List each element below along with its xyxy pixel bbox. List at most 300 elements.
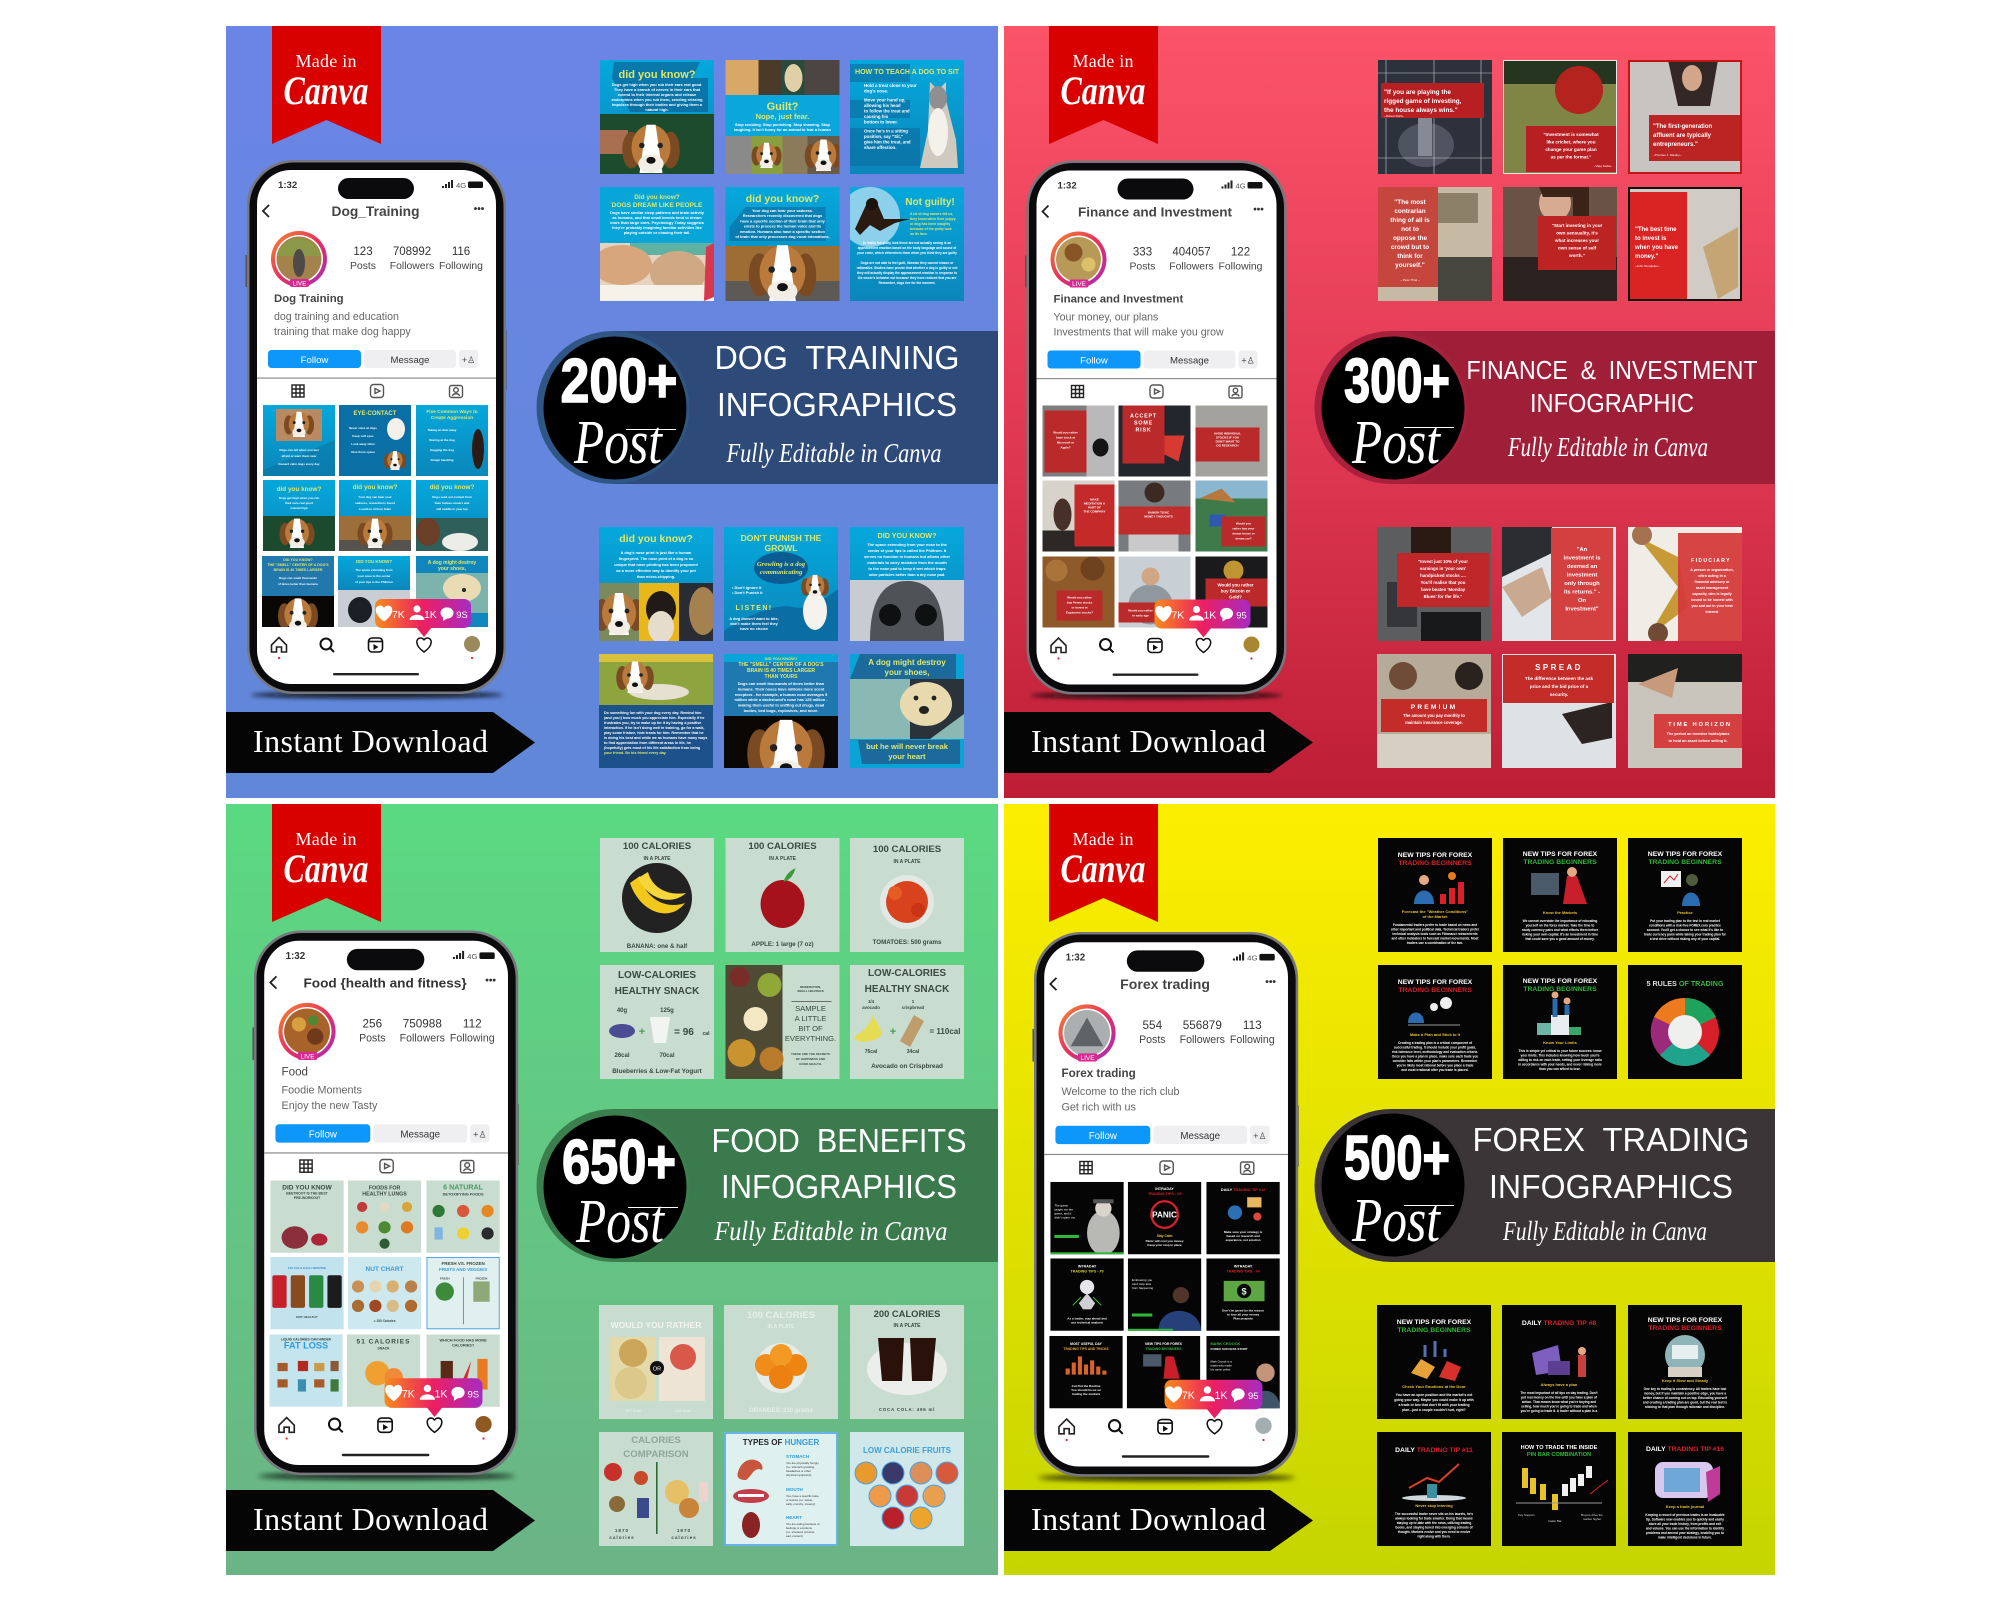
tile: forecast weather: TRADING BEGINNERS: [1398, 860, 1472, 867]
tile: contrarian quote: thing of all is: [1390, 217, 1430, 224]
profile header: Dog_Training: [332, 204, 420, 219]
tile: avocado on crispbread: 34cal: [907, 1049, 920, 1055]
tile: make a plan: [1378, 965, 1492, 1079]
tile: nose print: did you know?: [619, 533, 693, 545]
thumb: foods for healthy lungs: [348, 1180, 421, 1253]
stats: 123: [353, 246, 373, 258]
tile: rigged game quote: ~Robert Rolih~: [1384, 114, 1404, 118]
instant download arrow: Instant Download: [253, 723, 488, 759]
tile: don't punish the growl: have no choice: [740, 626, 769, 631]
tile: best time to invest: money.": [1635, 254, 1659, 260]
thumb: banish toxic money thoughts: MONEY THOUGHTS: [1144, 514, 1173, 518]
tile: teach a dog to sit: bottom to lower.: [864, 120, 898, 124]
tile: sample a little: GOOD HEALTH.: [799, 1062, 822, 1066]
thumb: avoid individual stocks: [1196, 406, 1268, 476]
thumb: day trading tips: trading the markets: [1072, 1392, 1100, 1396]
tile: daily tip 16: Keep a trade journal: [1666, 1504, 1704, 1509]
tile: cricket quote: "Investment is somewhat: [1543, 132, 1599, 137]
tile: apple: 100 CALORIES: [748, 841, 817, 852]
tile: contrarian quote: "The most: [1394, 199, 1427, 206]
likes bubble: [385, 1378, 482, 1417]
thumb: which food has more calories: [426, 1334, 500, 1407]
avatar: LIVE: [300, 1054, 315, 1061]
thumb: which food has more calories: CALORIES?: [452, 1343, 475, 1348]
tile: calories comparison: CALORIES: [631, 1435, 681, 1446]
thumb: dog photo: Dogs can tell when you feel: [279, 448, 319, 452]
tile: on investment: [1502, 527, 1616, 641]
bio: dog training and education: [274, 311, 399, 323]
tile: teach a dog to sit: HOW TO TEACH A DOG TO SIT: [855, 67, 960, 76]
thumb: five common ways: Hugging the dog: [430, 448, 454, 452]
status bar: 1:32: [1058, 180, 1077, 192]
thumb: new tips: TRADING BEGINNERS: [1145, 1347, 1182, 1351]
tile: avocado on crispbread: Avocado on Crispbread: [871, 1063, 943, 1070]
tile: guilt: Nope, just fear.: [756, 112, 809, 121]
thumb: accept some risk: ACCEPT: [1130, 414, 1157, 420]
thumb: apple: Apple?: [1060, 446, 1071, 450]
tile: types of hunger: STOMACH: [786, 1454, 810, 1459]
phone mockup: [1032, 932, 1299, 1481]
tile: fiduciary: financial advisory or: [1695, 580, 1730, 584]
buttons: [268, 350, 478, 368]
tile: teach a dog to sit: causing his: [864, 114, 889, 119]
status bar: 4G: [467, 952, 478, 961]
tile: best time to invest: to invest is: [1635, 236, 1667, 242]
tile: did you know ears: impulses through their bodies and giving them a: [612, 102, 703, 107]
thumb: robot: use technical analysis: [1071, 1321, 1103, 1325]
profile header: [1042, 204, 1264, 220]
thumb: 51 calories snack: SNACK: [377, 1347, 390, 1351]
tile: daily tip 11: thought. Markets evolve and you need to evolve: [1398, 1530, 1471, 1534]
tile: avocado on crispbread: 76cal: [865, 1049, 878, 1055]
tile: practice: trade currency pairs while taking your trading plan for: [1644, 932, 1727, 936]
buttons: +♙: [1241, 356, 1255, 366]
bio: [282, 1065, 378, 1112]
tile: not guilty: they know when their puppy: [910, 217, 956, 221]
thumb: daily tip 12: Make sure your strategy is: [1224, 1230, 1263, 1234]
tile: fiduciary: capacity, who is legally: [1692, 592, 1732, 596]
tile: would you rather: WOULD YOU RATHER: [611, 1320, 702, 1330]
tile: teach a dog to sit: allowing his head: [864, 103, 901, 108]
tile: banana: IN A PLATE: [643, 856, 671, 862]
tile: invest 10 percent: [1377, 527, 1491, 641]
tile: invest 10 percent: Blues' for the life.": [1424, 594, 1462, 599]
tile: beagle in field: is doing his best and while we as humans have many ways: [604, 736, 707, 740]
tile: first generation quote: [1628, 60, 1742, 174]
tile: blueberries and yogurt: 125g: [660, 1008, 674, 1014]
tile: types of hunger: MOUTH: [786, 1487, 804, 1492]
tile: daily tip 8: Always have a plan: [1541, 1382, 1578, 1387]
thumb: man in suit: Embracing you: [1132, 1278, 1153, 1282]
tile: first generation quote: affluent are typically: [1653, 133, 1712, 139]
tile: don't punish the growl: GROWL: [765, 543, 797, 553]
tile: did you know ears: extend to their internal organs and release: [618, 92, 697, 97]
stats: 113: [1243, 1019, 1262, 1032]
thumb: daily tip 12: based on research and: [1226, 1234, 1260, 1238]
tile: daily tip 16: tip. Software now enables you to quickly and easily: [1646, 1518, 1724, 1522]
thumb: dream house: Would you: [1236, 522, 1251, 526]
thumb: banish toxic money thoughts: BANISH TOXIC: [1148, 510, 1170, 514]
buttons: Follow: [309, 1130, 338, 1141]
tile: best time to invest: [1628, 187, 1742, 301]
tile: know your limits: TRADING BEGINNERS: [1523, 986, 1597, 993]
thumb: panic: Keep your stop in place: [1147, 1243, 1182, 1247]
banner title: INFOGRAPHICS: [721, 1168, 957, 1205]
tile: did you know sadness: Your dog can hear your sadness.: [752, 208, 813, 213]
likes bubble: [1165, 1380, 1262, 1419]
tile: know the markets: that could save you a good amount of money.: [1525, 937, 1595, 941]
ribbon: Made in Canva: [272, 804, 381, 922]
tile: beagle in field: interaction. If he isn't doing well in training, go for a walk,: [604, 726, 704, 730]
tile: keep it slow: sticking to that plan through rationale and discipline.: [1645, 1405, 1725, 1409]
thumb: accept some risk: [1118, 406, 1190, 476]
thumb: day trading tips: You should focus on: [1071, 1388, 1101, 1392]
post count badge: [544, 1116, 686, 1258]
profile header: Forex trading: [1120, 977, 1210, 992]
tile: low calorie fruits: LOW CALORIE FRUITS: [863, 1446, 952, 1455]
thumb: five common ways: Rough handling: [431, 458, 454, 462]
tile: sensuality quote: [1503, 185, 1617, 301]
ribbon: Made in Canva: [1049, 804, 1158, 922]
tile: on investment: its returns." -: [1564, 590, 1600, 596]
tile: coca cola: [850, 1305, 964, 1419]
ribbon: Made in Canva: Canva: [284, 68, 368, 113]
tile: blueberries and yogurt: 40g: [617, 1008, 628, 1014]
tile: coca cola: COCA COLA: 496 ml: [879, 1407, 935, 1412]
tile: cricket quote: change your game plan: [1545, 147, 1597, 152]
thumb: apple: Microsoft or: [1057, 440, 1075, 444]
tile: types of hunger: physical symptoms): [786, 1473, 811, 1477]
tile: guilt: Stop scolding. Stop punishing. Stop shaming. Stop: [735, 122, 831, 127]
thumb: meditation: MAKE: [1090, 498, 1099, 502]
thumb: panic: Panic will cost you money: [1146, 1239, 1184, 1243]
tile: spread: price and the bid price of a: [1530, 684, 1589, 689]
buttons: Message: [1170, 356, 1209, 366]
tile: check your emotions: NEW TIPS FOR FOREX: [1397, 1319, 1472, 1326]
thumb: fresh vs frozen: FRESH VS. FROZEN: [441, 1261, 485, 1266]
tile: blueberries and yogurt: cal: [703, 1031, 710, 1037]
tile: forecast weather: NEW TIPS FOR FOREX: [1398, 852, 1473, 859]
tile: forecast weather: and other indicators to forecast market movements. Most: [1392, 936, 1479, 940]
tile: blueberries and yogurt: Blueberries & Low-Fat Yogurt: [612, 1068, 703, 1075]
thumb: robot: TRADING TIPS - #9: [1070, 1270, 1104, 1274]
thumb: dollars: Plan properly: [1233, 1317, 1253, 1321]
tile: make a plan: and most irrational after you trade is placed.: [1401, 1068, 1469, 1072]
profile header: [1050, 977, 1276, 992]
tile: contrarian quote: crowd but to: [1391, 244, 1429, 251]
tile: know the markets: NEW TIPS FOR FOREX: [1523, 851, 1598, 858]
likes bubble: [1154, 600, 1250, 638]
tile: types of hunger: You crave a specific taste: [786, 1494, 819, 1498]
thumb: nose: DID YOU KNOW?: [356, 559, 392, 564]
thumb: man in hat quote: game, and it: [1054, 1212, 1071, 1216]
tile: banana: [600, 838, 714, 952]
thumb: man in hat quote: The game: [1054, 1203, 1068, 1207]
thumb: did you know dog: their ears real good: [285, 501, 313, 505]
tile: sample a little: THESE ARE THE SECRETS: [791, 1052, 830, 1056]
instant download arrow: [226, 712, 535, 773]
ribbon: Made in Canva: Made in: [296, 829, 356, 849]
thumb: avoid individual stocks: DON'T WANT TO: [1216, 440, 1240, 444]
ribbon: Made in Canva: Made in: [296, 51, 356, 71]
thumb: fresh vs frozen: FRUITS AND VEGGIES: [439, 1267, 487, 1272]
tile: on investment: investment: [1567, 572, 1597, 578]
tile: destroy your shoes: your shoes,: [885, 668, 929, 677]
status bar: 1:32: [278, 180, 297, 191]
thumb: foods for healthy lungs: FOODS FOR: [369, 1186, 400, 1192]
tile: make a plan: Creating a trading plan is a critical component of: [1398, 1041, 1473, 1045]
tile: best time to invest: "The best time: [1635, 227, 1677, 233]
thumb: daily tip 12: experience, not emotion: [1226, 1238, 1261, 1242]
status bar: 4G: [456, 181, 466, 190]
tile: types of hunger: or texture (i.e. sweet,: [786, 1498, 813, 1502]
profile header: •••: [474, 204, 485, 215]
tile: fiduciary: asset management: [1696, 586, 1729, 590]
bio: Forex trading: [1062, 1067, 1136, 1080]
tile: types of hunger: You are physically hungry: [786, 1461, 819, 1465]
thumb: sodas: NOT HEALTHY: [296, 1315, 318, 1319]
tile: types of hunger: (i.e. stomach growling,: [786, 1465, 815, 1469]
tile: destroy your shoes: [850, 654, 964, 768]
thumb: nose: your nose to the center: [357, 574, 391, 578]
tile: oranges: 100 CALORIES: [747, 1310, 816, 1321]
thumb: five common ways: [416, 405, 488, 476]
tile: time horizon: The period an investor holds/plans: [1667, 732, 1729, 736]
tile: dogs dream: playing outside or chasing their tail.: [624, 230, 690, 235]
tile: daily tip 16: DAILY TRADING TIP #16: [1646, 1446, 1724, 1453]
tile: don't punish the growl: DON'T PUNISH THE: [741, 533, 822, 543]
tile: avocado on crispbread: +: [890, 1026, 896, 1038]
tile: philtrum: center of your lips is called the Philtrum. It: [868, 548, 947, 553]
tile: check your emotions: Check Your Emotions at the Door: [1402, 1384, 1466, 1389]
banner title: FOREX TRADING: [1472, 1121, 1750, 1158]
buttons: Follow: [301, 355, 328, 366]
thumb: nose: of your lips is the Philtrum: [355, 580, 393, 584]
tile: teach a dog to sit: give him the treat, and: [864, 140, 911, 144]
status bar: 1:32: [286, 951, 306, 962]
thumb: 51 calories snack: 51 CALORIES: [357, 1339, 411, 1346]
post count badge: 500+: [1344, 1124, 1450, 1193]
thumb: did you know beagle: sadness, researchers found: [355, 501, 395, 505]
tile: did you know ears: natural high.: [645, 107, 669, 112]
tile: beagle in field: play some frisbee, hide treats for him. Remember that he: [604, 731, 704, 735]
stats: Posts: [359, 1033, 386, 1045]
tile: philtrum: to the nose pad to keep it wet which traps: [868, 566, 946, 571]
tile: would you rather: OR: [653, 1366, 661, 1372]
tile: invest 10 percent: handpicked stocks ....: [1420, 573, 1466, 578]
stats: 122: [1231, 246, 1250, 258]
tile: daily tip 11: The successful trader never sits on his laurels, he's: [1395, 1512, 1473, 1516]
thumb: smell centre: THE "SMELL" CENTER OF A DOG'S: [267, 563, 329, 567]
stats: [350, 246, 483, 272]
tile: invest 10 percent: "Invest just 10% of your: [1418, 559, 1468, 564]
tile: did you know sadness: have a specific section of their brain that only: [740, 218, 826, 223]
instant download arrow: [1004, 712, 1313, 773]
tile: dogs dream: as humans, and that small breeds tend to dream: [612, 215, 702, 220]
tab icons: [1072, 385, 1242, 398]
thumb: mark croock: trader who made: [1210, 1364, 1232, 1368]
tile: don't punish the growl: communicating: [760, 569, 803, 576]
tile: apple: APPLE: 1 large (7 oz): [751, 941, 814, 948]
thumb: bitcoin or gold: Gold?: [1229, 594, 1242, 600]
thumb: smell centre: Dogs can smell thousands: [279, 576, 317, 580]
thumb: dollars: INTRADAY: [1234, 1265, 1253, 1269]
thumb: mark croock: Mark Croock is a: [1210, 1359, 1232, 1363]
stats: Followers: [1169, 262, 1214, 272]
tile: tomatoes: [850, 838, 964, 952]
thumb: man in suit: from happening: [1132, 1286, 1153, 1290]
tile: nose print: than micro-chipping.: [637, 574, 675, 579]
thumb: smell centre: [262, 556, 334, 632]
likes bubble: 1K: [1204, 610, 1216, 622]
banner title: INFOGRAPHICS: [717, 386, 957, 423]
thumb: bitcoin or gold: buy Bitcoin or: [1221, 588, 1251, 594]
tile: smell centre: THAN YOURS: [765, 674, 798, 680]
tile: best time to invest: when you have: [1634, 245, 1679, 251]
tile: philtrum: serves no function in humans but allows other: [864, 554, 950, 559]
tile: keep it slow: TRADING BEGINNERS: [1648, 1325, 1722, 1332]
tile: pin bar combination: Key Support: [1518, 1513, 1535, 1517]
tile: beagle in field: to find appreciation from different areas in life, he: [604, 741, 691, 745]
status bar: 4G: [1247, 954, 1258, 963]
tile: nose print: fingerprint. The nose print of a dog is so: [619, 556, 694, 561]
thumb: five common ways: Staring at the dog: [429, 438, 455, 442]
status bar: 4G: [1236, 182, 1246, 190]
tile: don't punish the growl: A dog doesn't want to bite,: [729, 616, 779, 621]
tile: types of hunger: feelings or emotions: [786, 1526, 812, 1530]
panel background: [226, 26, 998, 798]
tile: fiduciary: often acting in a: [1698, 574, 1727, 578]
banner title: FINANCE & INVESTMENT: [1466, 357, 1758, 385]
panel: finance and investment: [1004, 26, 1775, 798]
tile: would you rather: [599, 1305, 713, 1419]
tile: 5 rules of trading: 5 RULES OF TRADING: [1646, 979, 1724, 988]
instant download arrow: [226, 1490, 535, 1551]
tile: don't punish the growl: • Don't Punish it: [732, 590, 763, 595]
tile: forecast weather: of the Market: [1423, 914, 1448, 919]
tile: philtrum: odor particles better than a dry nose pad.: [869, 572, 945, 577]
tile: know the markets: study currency pairs and what effects them before: [1522, 928, 1598, 932]
tile: premium: The amount you pay monthly to: [1403, 713, 1465, 718]
tile: teach a dog to sit: to follow the treat and: [864, 108, 910, 114]
tile: oranges: IN A PLATE: [767, 1324, 795, 1330]
tile: know your limits: willing to risk on each trade, setting your leverage ratio: [1517, 1058, 1602, 1062]
tile: did you know sadness: of brain that only processes dog vocal intonations.: [735, 234, 830, 239]
bio: [274, 293, 411, 338]
tile: dogs dream: more than large ones. Psychology Today suggests: [610, 220, 704, 225]
tile: practice: Practice: [1677, 910, 1694, 915]
ribbon: Made in Canva: Made in: [1072, 829, 1134, 849]
thumb: eye-contact: Give them space: [351, 450, 375, 454]
tile: teach a dog to sit: [850, 60, 964, 174]
thumb: day trading tips: MOST USEFUL DAY: [1070, 1342, 1103, 1346]
thumb: dog photo: Reward calm dogs every day: [278, 462, 320, 466]
tile: premium: PREMIUM: [1411, 704, 1457, 711]
tile: teach a dog to sit: dog's nose.: [864, 88, 888, 94]
tile: practice: TRADING BEGINNERS: [1648, 859, 1722, 866]
stats: [1130, 246, 1263, 272]
thumb: avoid individual stocks: STOCKS IF YOU: [1216, 436, 1239, 440]
tile: low calorie fruits: [850, 1432, 964, 1546]
tile: premium: maintain insurance coverage.: [1405, 720, 1463, 725]
tile: not guilty: your voice, which determines them when you think they are guilty: [857, 251, 957, 255]
avatar: [278, 1003, 336, 1061]
tile: avocado on crispbread: crispbread: [902, 1005, 925, 1010]
tile: sensuality quote: "Start investing in your: [1552, 223, 1603, 228]
tile: contrarian quote: not to: [1401, 226, 1419, 233]
buttons: +♙: [473, 1130, 487, 1140]
tile: types of hunger: HEART: [786, 1515, 802, 1520]
thumb: dream house: rather buy your: [1232, 526, 1255, 530]
tile: avocado on crispbread: LOW-CALORIES: [868, 968, 946, 979]
post count badge: Post: [575, 1188, 665, 1256]
avatar: LIVE: [1072, 281, 1086, 288]
thumb: accept some risk: SOME: [1134, 420, 1153, 426]
tile: time horizon: [1628, 654, 1742, 768]
tile: premium: [1377, 654, 1491, 768]
tile: beagle in field: [599, 654, 713, 768]
stats: [1139, 1019, 1275, 1046]
tile: spread: The difference between the ask: [1525, 676, 1594, 681]
thumb: eye-contact: Keep soft eyes: [352, 434, 374, 438]
tile: blueberries and yogurt: HEALTHY SNACK: [615, 986, 700, 997]
tile: types of hunger: salty, crunchy, creamy): [786, 1502, 815, 1506]
thumb: apple: [1042, 406, 1114, 476]
thumb: mark croock: [1206, 1336, 1280, 1408]
tile: forecast weather: Fundamental traders prefer to trade based on news and: [1393, 923, 1477, 927]
bottom nav: [279, 1416, 492, 1456]
thumb: did you know woman: their human owners and: [435, 501, 470, 505]
stats: Posts: [1130, 262, 1156, 272]
tile: daily tip 8: put real money on the line until you have a plan of: [1521, 1396, 1598, 1400]
tile: banana: BANANA: one & half: [627, 943, 688, 950]
banner title: DOG TRAINING: [714, 339, 960, 376]
thumb: smell centre: BRAIN IS 40 TIMES LARGER: [274, 568, 323, 572]
thumb: man in hat quote: [1050, 1182, 1124, 1255]
tile: keep it slow: better chance of coming out on top. Educating yourself: [1643, 1396, 1728, 1400]
tile: sensuality quote: own sense of self: [1558, 246, 1597, 250]
status bar: [286, 949, 495, 970]
tile: calories comparison: COMPARISON: [623, 1449, 689, 1460]
thumb: nut chart: [348, 1257, 421, 1329]
tile: tomatoes: 100 CALORIES: [873, 844, 942, 855]
thumb: mark croock: MARK CROOCK: [1210, 1341, 1240, 1346]
tile: calories comparison: [599, 1432, 713, 1546]
bio: Investments that will make you grow: [1054, 326, 1224, 338]
thumb: fresh vs frozen: FRESH: [440, 1276, 450, 1280]
tile: destroy your shoes: A dog might destroy: [868, 658, 946, 667]
tile: practice: [1628, 838, 1742, 952]
tile: not guilty: Remember, dogs live for the moment.: [879, 281, 936, 285]
post count badge: Post: [573, 409, 663, 477]
stats: Following: [450, 1033, 495, 1045]
thumb: did you know dog: Dogs get high when you rub: [279, 496, 319, 500]
tile: beagle in field: Do something fun with your dog every day. Remind him: [604, 711, 702, 715]
panel: dog training: [226, 26, 998, 798]
instant download arrow: [1004, 1490, 1313, 1551]
tile: smell centre: million while a dachshund's nose has 125 million -: [734, 697, 828, 702]
tile: not guilty: Not guilty!: [905, 197, 955, 208]
tile: types of hunger: (i.e. stressed, anxious,: [786, 1530, 815, 1534]
phone mockup: [246, 160, 506, 698]
thumb: meditation: MEDITATION A: [1084, 502, 1106, 506]
profile header: •••: [485, 976, 496, 987]
thumb: day trading tips: Cut Out the Routine: [1072, 1384, 1101, 1388]
tile: make a plan: NEW TIPS FOR FOREX: [1398, 979, 1473, 986]
tile: on investment: deemed an: [1567, 564, 1598, 570]
tile: smell centre: DID YOU KNOW?: [765, 656, 798, 661]
thumb: smell centre: of times better than humans: [278, 582, 318, 586]
